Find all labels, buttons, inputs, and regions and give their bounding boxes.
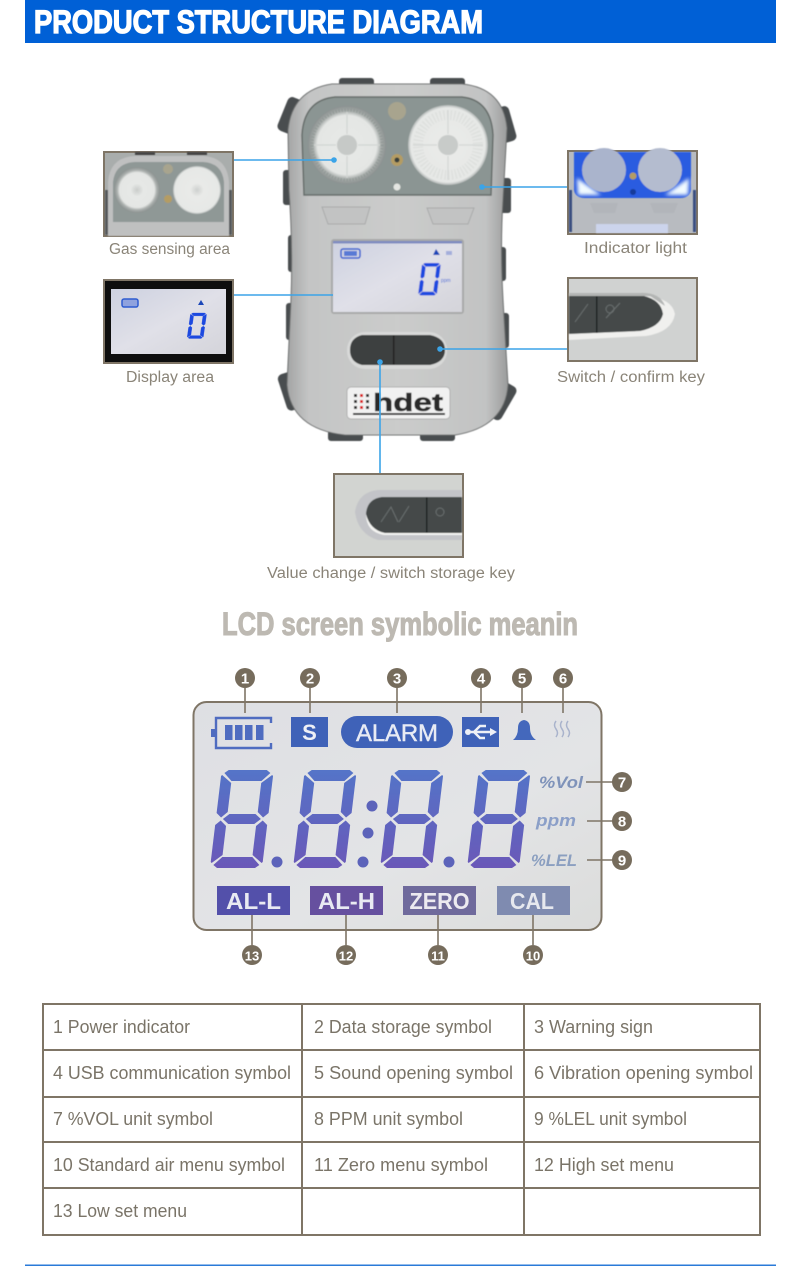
number badges: 10 [526,948,540,964]
icon: bell [513,720,536,740]
leader lines [245,688,622,945]
table text [53,1017,753,1221]
number badges: 12 [339,948,353,964]
unit: %LEL: %LEL [531,852,577,870]
table text: 6 Vibration opening symbol [534,1063,753,1083]
table text: 3 Warning sign [534,1017,653,1037]
icon: USB [462,717,499,747]
display recess [331,239,464,314]
seven-segment digits [210,770,531,868]
label: ZERO: ZERO [410,888,470,914]
hdet logo plate: hdet [373,389,444,417]
number badges: 2 [306,670,314,688]
label: CAL [497,886,570,915]
table text: 4 USB communication symbol [53,1063,291,1083]
icon: storage S [291,717,328,747]
bottom rule [25,1264,776,1266]
icon: vibration [554,721,570,737]
number badges: 11 [431,948,445,964]
right gas sensor [408,105,488,185]
label: AL-L: AL-L [226,888,281,914]
hdet logo plate [347,387,450,419]
thumbnail: switch confirm key [568,278,697,361]
label: indicator light: Indicator light [584,240,688,257]
left gas sensor [308,106,386,184]
table text: 5 Sound opening symbol [314,1063,513,1083]
center screws [388,102,406,190]
number badges: 8 [618,814,626,830]
device LCD screen: ppm [441,278,451,284]
device body [287,84,508,435]
table text: 2 Data storage symbol [314,1017,492,1037]
side and top bumpers [276,78,518,441]
label: switch confirm key: Switch / confirm key [557,369,705,386]
device LCD screen [333,241,462,312]
label: gas sensing area: Gas sensing area [109,241,230,258]
table text: 12 High set menu [534,1155,674,1175]
legend table [43,1004,760,1235]
table text: 1 Power indicator [53,1017,190,1037]
thumbnail: value change key [334,474,463,557]
label: value change key: Value change / switch storage key [267,565,515,582]
label: display area: Display area [126,369,214,386]
table text: 13 Low set menu [53,1201,187,1221]
title banner [25,0,776,43]
thumbnail: display area [104,280,233,363]
thumbnail: gas sensing area [104,152,233,236]
number badges: 5 [518,670,526,688]
icon: storage S: S [302,720,317,745]
number badges [235,668,632,965]
heading: LCD screen: LCD screen symbolic meanin [222,606,578,642]
label: AL-H [310,886,383,915]
sensor window [302,97,493,195]
title banner: PRODUCT STRUCTURE DIAGRAM [34,4,483,40]
icon: battery [211,718,271,748]
table grid [43,1004,760,1235]
number badges: 4 [477,670,486,688]
icon: ALARM [341,716,453,748]
table text: 7 %VOL unit symbol [53,1109,213,1129]
number badges: 3 [393,670,401,688]
table text: 8 PPM unit symbol [314,1109,463,1129]
LCD symbol diagram [194,668,632,965]
LCD panel [194,702,602,930]
number badges: 6 [559,670,567,688]
icon: ALARM: ALARM [356,720,438,747]
label: AL-H: AL-H [318,888,375,914]
table text: 9 %LEL unit symbol [534,1109,687,1129]
unit: ppm: ppm [535,812,576,830]
thumbnail: indicator light [568,148,697,234]
label: CAL: CAL [510,888,554,914]
table text: 11 Zero menu symbol [314,1155,488,1175]
device keys [347,332,447,369]
number badges: 13 [245,948,259,964]
device photo: gas detector [276,78,518,441]
number badges: 7 [618,774,626,792]
clip tabs [322,207,474,224]
table text: 10 Standard air menu symbol [53,1155,285,1175]
number badges: 9 [618,852,626,870]
label: AL-L [217,886,290,915]
number badges: 1 [241,670,249,688]
unit: %Vol: %Vol [539,774,583,792]
callout lines [233,157,568,474]
